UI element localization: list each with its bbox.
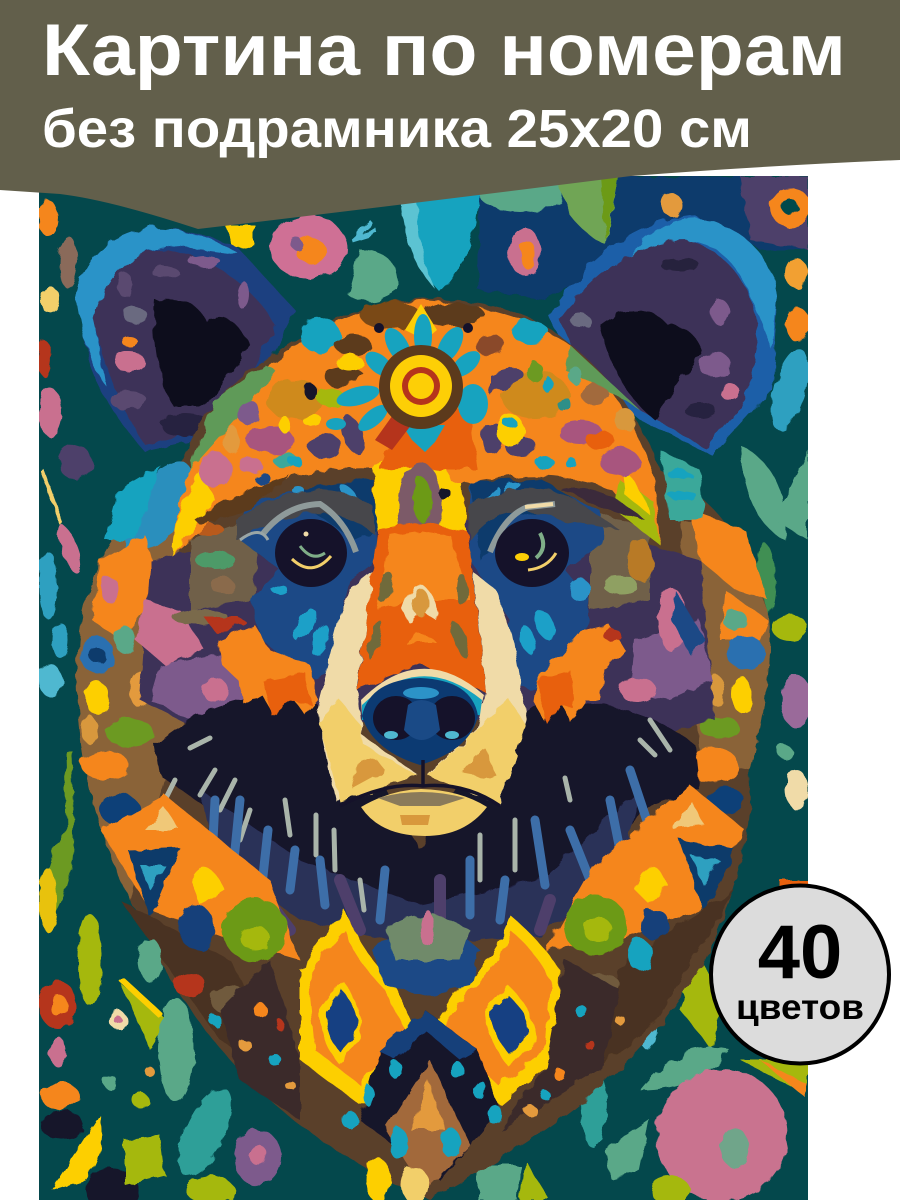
background flowers and leaves — [37, 172, 816, 1200]
orange fur fringe under eyes — [214, 618, 625, 725]
left ear — [76, 228, 295, 452]
right ear — [548, 215, 778, 455]
eyes — [240, 504, 569, 587]
left eye — [240, 504, 356, 587]
mouth and lower lip — [340, 760, 500, 836]
badge caption: цветов — [736, 988, 864, 1027]
forehead flower ornament — [326, 304, 488, 452]
painting background — [39, 176, 808, 1200]
nose — [361, 669, 484, 765]
face purple cheeks — [135, 510, 715, 740]
painting: bear by numbers — [37, 172, 816, 1200]
forehead orange dome — [172, 300, 660, 556]
snout cream sides — [316, 572, 527, 805]
badge: 40 colours — [711, 886, 889, 1064]
bear head base — [77, 298, 770, 1200]
orange snout stripe — [357, 522, 486, 693]
title banner — [0, 0, 900, 229]
title line one: Картина по номерам — [42, 10, 846, 91]
muzzle whiskers and fur strokes — [165, 720, 670, 930]
side cheek colours — [125, 461, 191, 548]
lower ornament: chest — [100, 785, 745, 1200]
badge number: 40 — [758, 910, 842, 995]
black muzzle fur — [155, 690, 700, 945]
title line two: без подрамника 25х20 см — [42, 99, 752, 159]
right eye — [490, 504, 569, 587]
blue eye patches — [236, 478, 620, 690]
